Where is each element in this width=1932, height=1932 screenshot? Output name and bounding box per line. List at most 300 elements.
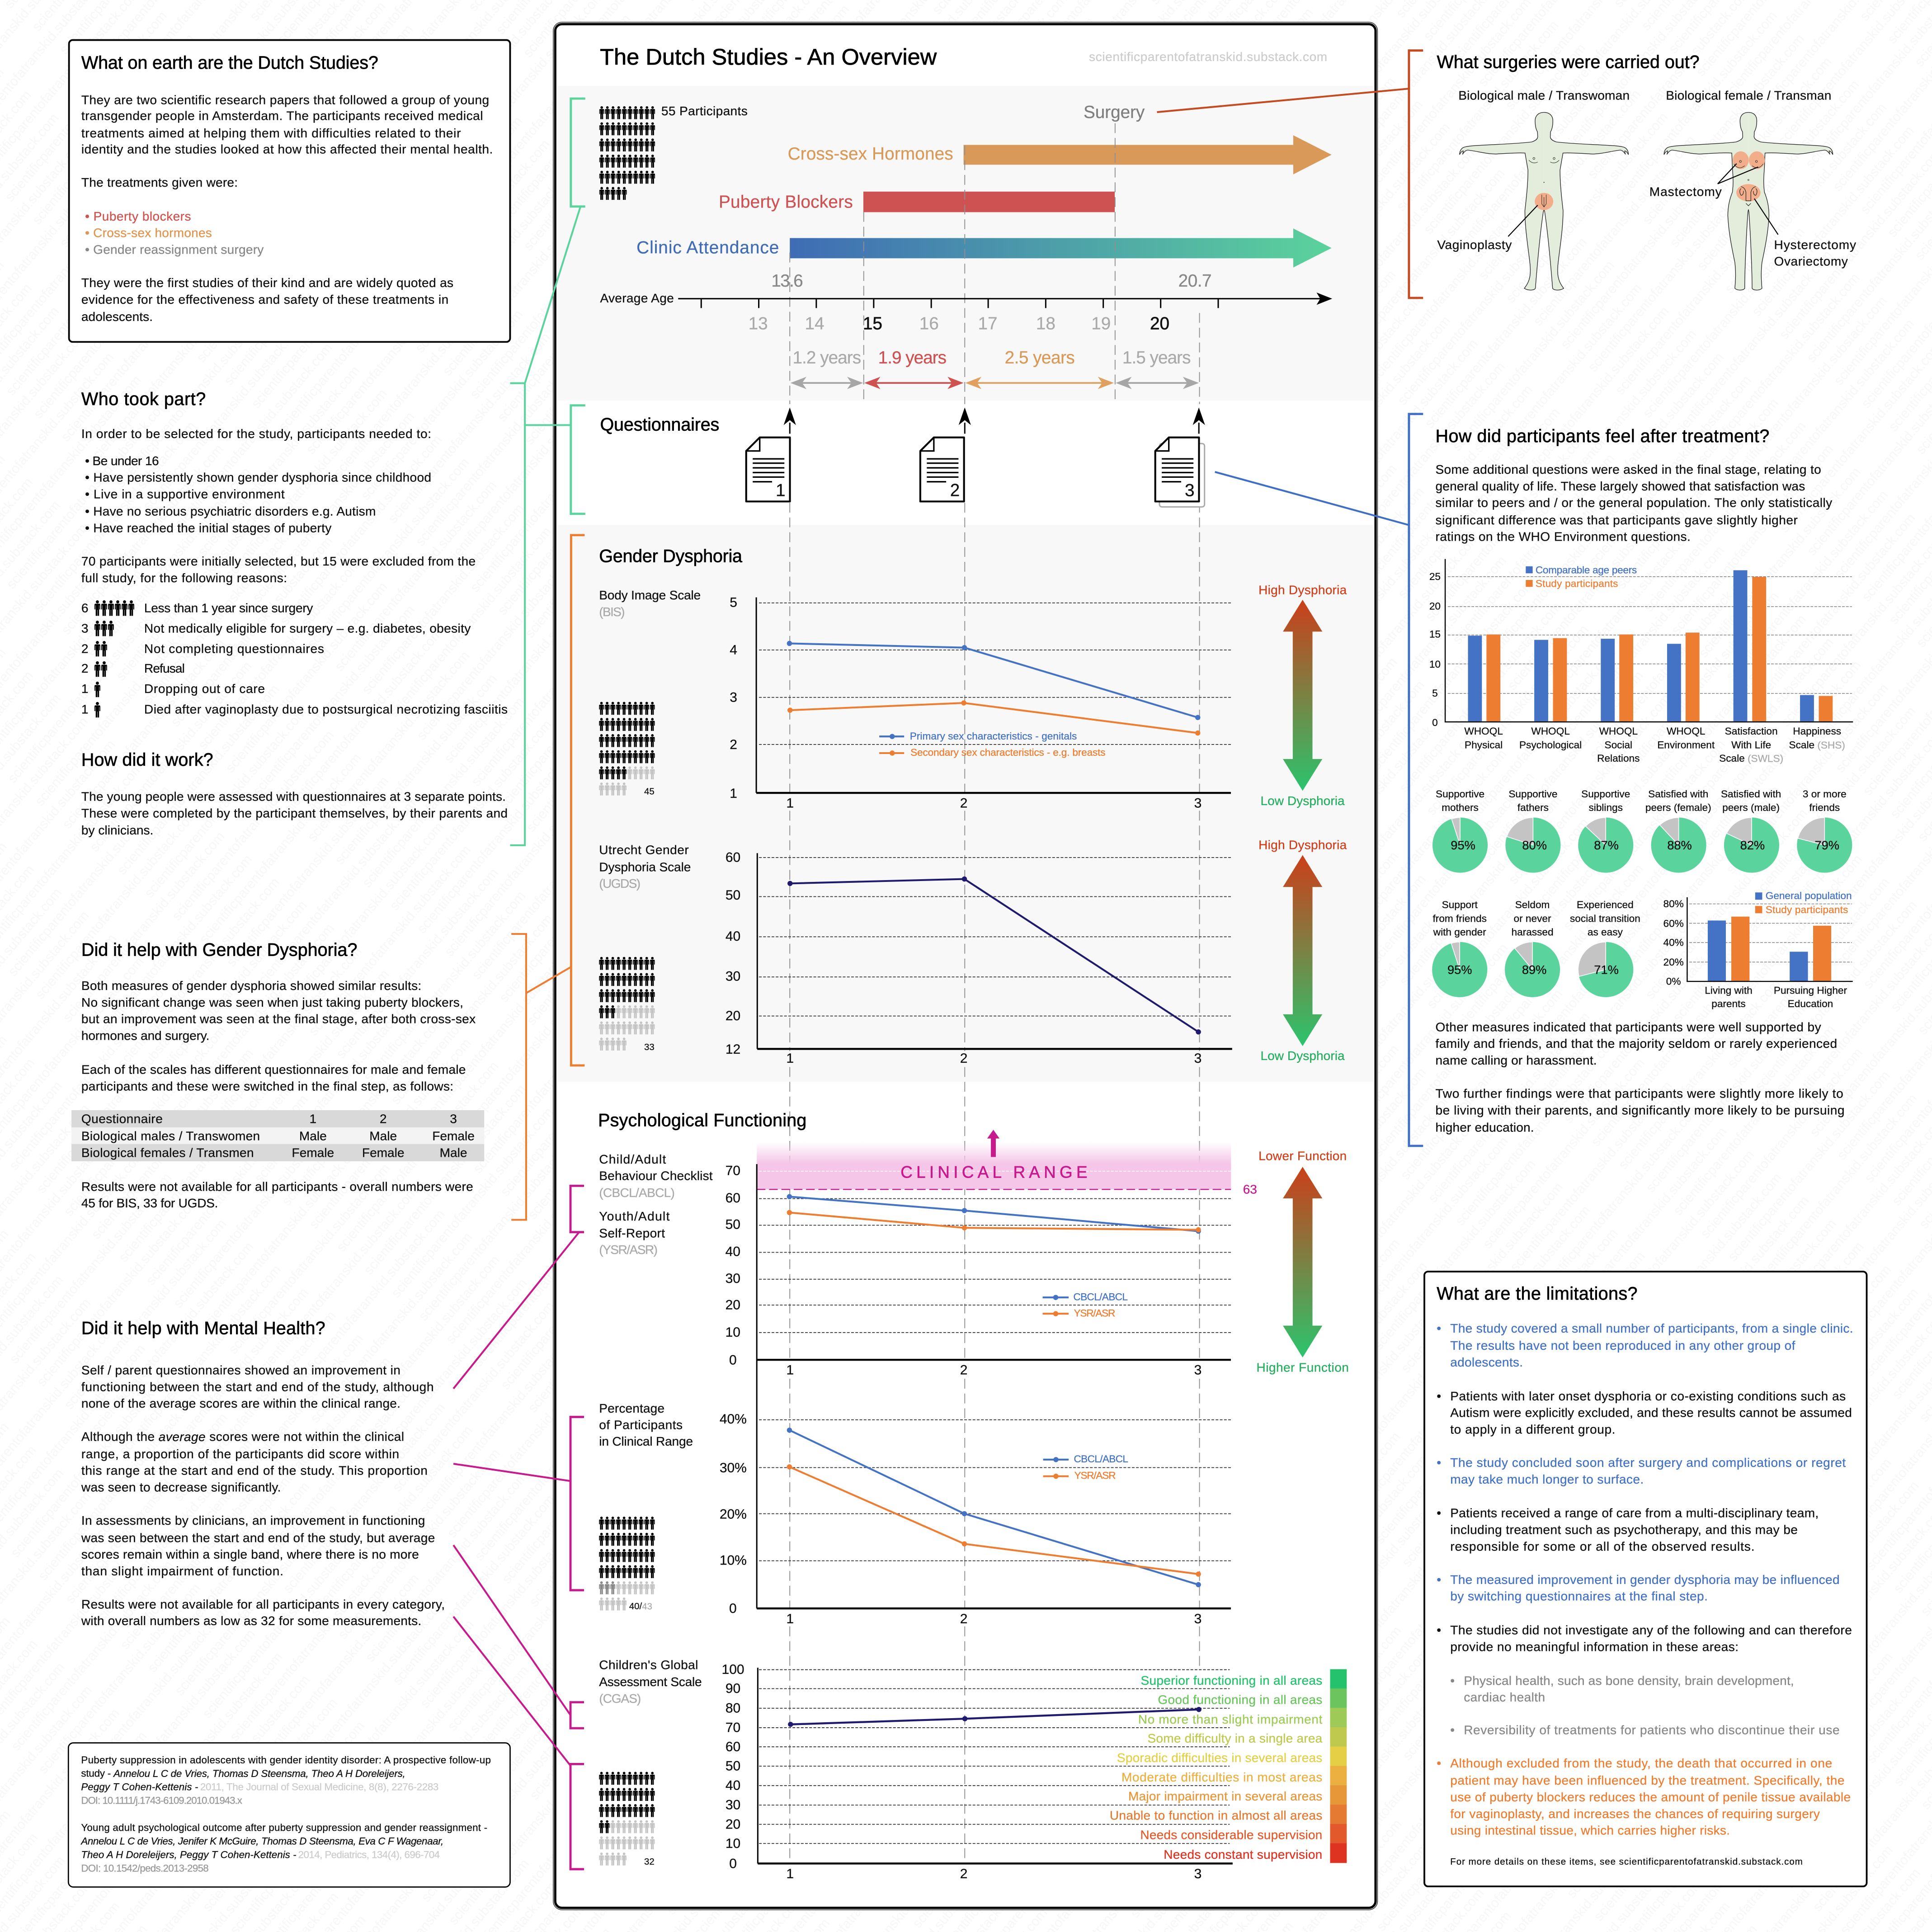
text block: results availability: Results were not available for all participants - overall numbers were [81,1179,473,1193]
limitation: regret: The study concluded soon after surgery and complications or regret [1450,1456,1846,1470]
text block: intro: adolescents. [81,310,153,324]
label: utrecht gender dysphoria scale [599,843,691,891]
pie: satisfied with peers female: 88% [1667,838,1692,852]
pie: seldom or never harassed: or never [1514,913,1551,924]
bracket: CGAS participants [570,1764,584,1869]
list: exclusion reasons: Not completing questionnaires [144,642,324,656]
text block: other measures: name calling or harassment. [1436,1053,1597,1067]
label: 55 participants: 55 Participants [661,104,748,118]
limitation: death excluded: for vaginoplasty, and increases the chances of requiring surgery [1450,1807,1820,1821]
limitation: multi-disciplinary care: • [1437,1506,1441,1520]
table: questionnaires by biological sex: Female [362,1145,405,1159]
pie: three or more friends: 3 or more [1803,788,1847,800]
pie: supportive siblings: Supportive [1581,788,1630,800]
limitation: excluded patients: • [1437,1389,1441,1403]
panel: citations [68,1743,510,1887]
panel: citations: Young adult psychological outcome after puberty suppression and gender reassignment - [81,1822,487,1833]
durations: 1.5 years [1122,348,1191,368]
category labels [1464,726,1845,764]
text block: did it help with gender dysphoria: participants and these were switched in the final step, as follows: [81,1079,453,1093]
chart: body image scale: 1 [730,786,737,801]
heading: feel: How did participants feel after treatment? [1436,426,1769,446]
heading: questionnaires: Questionnaires [600,415,719,435]
pie: support from friends with gender: from friends [1433,913,1487,924]
limitation: no information: • [1437,1623,1441,1637]
label: body image scale: (BIS) [599,605,625,619]
durations: 1.2 years [792,348,861,368]
text block: how did it work: How did it work? [81,750,213,770]
text block: intro: treatments aimed at helping them with difficulties related to their [81,126,461,140]
limitation: excluded patients: Patients with later onset dysphoria or co-existing conditions such as [1450,1389,1846,1403]
text block: how did it work: The young people were assessed with questionnaires at 3 separate points. [81,790,506,804]
chart: CBCL and YSR scores: 0 [729,1352,737,1367]
panel: citations: 2014, Pediatrics, 134(4), 696-704 [298,1849,440,1860]
label: CGAS: (CGAS) [599,1692,641,1706]
table: questionnaires by biological sex: 3 [450,1112,457,1126]
label: CBCL and YSR: (YSR/ASR) [599,1243,658,1257]
text block: did it help with mental health: functioning between the start and end of the study, although [81,1380,434,1394]
label: cross-sex hormones: Cross-sex Hormones [788,144,953,164]
list: exclusion reasons: 2 [81,642,89,656]
figure: biological female: Mastectomy [1649,184,1722,198]
durations [792,348,1191,368]
axis: age: 16 [919,314,939,333]
limitation: death excluded: patient may have been influenced by the treatment. Specifically, the [1450,1773,1844,1787]
limitation: death excluded: use of puberty blockers reduces the amount of penile tissue available [1450,1790,1851,1804]
text block: intro: The treatments given were: [81,175,238,189]
figure: biological male: Biological male / Transwoman [1458,88,1630,102]
chart: CBCL and YSR scores: 60 [726,1191,740,1206]
text block: other measures: Two further findings were that participants were slightly more likely to [1436,1087,1843,1101]
limitation: regret: may take much longer to surface. [1450,1472,1644,1486]
text block: how did it work: These were completed by the participant themselves, by their parents and [81,806,508,820]
pie: support from friends with gender: Support [1442,899,1478,910]
chart: living with parents and higher education: 60% [1663,918,1684,929]
CGAS band labels: Superior functioning in all areas [1141,1673,1322,1687]
text block: did it help with mental health: was seen between the start and end of the study, but average [81,1531,435,1545]
icon: six people [94,600,134,616]
chart: CBCL and YSR scores: 20 [726,1298,740,1313]
text block: intro: They are two scientific research papers that followed a group of young [81,93,489,107]
chart: CBCL and YSR scores: 40 [726,1244,740,1259]
bracket: CGAS [570,1702,584,1728]
limitation: excluded patients: Autism were explicitly excluded, and these results cannot be assumed [1450,1406,1852,1420]
scale arrow: UGDS dysphoria: High Dysphoria [1258,838,1347,852]
chart: utrecht gender dysphoria scale: 2 [960,1051,967,1066]
list: exclusion reasons: Died after vaginoplasty due to postsurgical necrotizing fasciitis [144,702,508,716]
category labels: WHOQL [1667,726,1705,737]
chart: living with parents and higher education: Pursuing Higher [1774,985,1847,996]
category labels: With Life [1731,739,1771,750]
icon: document 2: 2 [950,481,960,500]
limitation: multi-disciplinary care: Patients received a range of care from a multi-disciplinary team, [1450,1506,1819,1520]
pie: social transition as easy: Experienced [1577,899,1634,910]
label: CGAS: Assessment Scale [599,1675,702,1689]
list: exclusion reasons: 6 [81,601,89,615]
arrow: questionnaire 2 [959,407,971,434]
series: YSR/ASR [787,1210,1201,1232]
CGAS band labels: Major impairment in several areas [1128,1789,1322,1803]
text block: who took part: • Have reached the initial stages of puberty [85,521,331,535]
chart: utrecht gender dysphoria scale: 40 [726,929,740,944]
scale arrow: BIS dysphoria: High Dysphoria [1258,583,1347,597]
category labels: Scale (SHS) [1789,739,1845,750]
chart: quality of life bars: 5 [1432,688,1438,699]
limitation: switching questionnaires: by switching questionnaires at the final step. [1450,1589,1708,1603]
limitation: regret: • [1437,1456,1441,1470]
label: percentage of participants in clinical range: of Participants [599,1418,683,1432]
CGAS colour scale [1330,1669,1347,1863]
category labels: WHOQL [1464,726,1503,737]
text block: did it help with mental health: none of the average scores are within the clinical range. [81,1396,401,1410]
pie: supportive siblings: siblings [1589,802,1623,813]
chart: CGAS: 40 [726,1778,740,1793]
pie: seldom or never harassed: Seldom [1515,899,1550,910]
chart: CGAS: 20 [726,1817,740,1832]
list: exclusion reasons [81,600,508,717]
chart: utrecht gender dysphoria scale: 30 [726,969,740,984]
list: exclusion reasons: Less than 1 year since surgery [144,601,313,615]
legend [1043,1291,1128,1319]
chart: CGAS: 2 [960,1866,967,1881]
pie: support from friends with gender [1432,899,1487,997]
connector: questionnaire 3 to how did participants feel [1215,472,1409,525]
CGAS band labels: Unable to function in almost all areas [1110,1809,1322,1823]
category labels: Satisfaction [1725,726,1778,737]
pie: satisfied with peers female: Satisfied with [1648,788,1708,800]
legend [1043,1453,1128,1481]
limitation: no information: • [1450,1723,1455,1737]
figure: biological female [1649,88,1856,290]
panel: what are the limitations [1424,1272,1867,1886]
chart: CGAS: 60 [726,1739,740,1754]
pie: supportive mothers: 95% [1451,838,1475,852]
label: CBCL and YSR: Child/Adult [599,1152,666,1166]
chart: body image scale [730,595,1231,810]
scale arrow: function: Higher Function [1256,1361,1349,1375]
pie: social transition as easy: 71% [1594,962,1619,976]
text block: did it help with mental health: range, a proportion of the participants did score within [81,1447,399,1461]
panel: citations: Theo A H Doreleijers, Peggy T Cohen-Kettenis - [81,1849,297,1860]
label: average age: Average Age [600,291,674,305]
bracket: percentage in clinical range [570,1417,584,1590]
text block: additional questions [1436,462,1832,544]
pie: three or more friends [1797,788,1852,873]
legend [879,730,1106,758]
chart: utrecht gender dysphoria scale [726,850,1232,1066]
chart: percentage in clinical range [720,1412,1231,1626]
text block: who took part: In order to be selected for the study, participants needed to: [81,427,431,441]
chart: CGAS: 3 [1194,1866,1202,1881]
arrow: 1.9 years [864,377,964,389]
pie: supportive fathers: Supportive [1508,788,1557,800]
text block: results availability [81,1179,473,1210]
limitation: switching questionnaires: The measured improvement in gender dysphoria may be influenced [1450,1573,1840,1587]
scale arrow: BIS dysphoria: Low Dysphoria [1260,794,1345,808]
pie: supportive mothers: Supportive [1436,788,1484,800]
text block: did it help with gender dysphoria: but an improvement was seen at the final stage, after both cross-sex [81,1012,476,1026]
pie: supportive siblings [1578,788,1633,873]
chart: living with parents and higher education: 80% [1663,898,1684,909]
category labels: WHOQL [1599,726,1638,737]
chart: utrecht gender dysphoria scale: 50 [726,888,740,903]
scale arrow: BIS dysphoria [1258,583,1347,808]
chart: living with parents and higher education: parents [1711,998,1746,1009]
category labels: WHOQL [1531,726,1570,737]
arrow: 1.2 years [791,377,863,389]
pie: supportive mothers [1433,788,1488,873]
text block: additional questions: general quality of life. These largely showed that satisfaction was [1436,479,1805,493]
label: utrecht gender dysphoria scale: Dysphoria Scale [599,860,691,874]
icon: BIS participants [599,702,655,797]
arrow: 1.5 years [1116,377,1199,389]
pie: three or more friends: 79% [1814,838,1839,852]
figure: biological male: Vaginoplasty [1437,238,1512,252]
list: exclusion reasons: 2 [81,661,89,675]
label: clinic attendance: Clinic Attendance [636,238,779,257]
series: primary sex characteristics [787,641,1200,720]
pie: support from friends with gender: 95% [1447,962,1472,976]
limitation: no information: Reversibility of treatments for patients who discontinue their use [1464,1723,1840,1737]
scale arrow: function [1256,1149,1349,1375]
chart: living with parents and higher education [1663,890,1853,1009]
legend: Study participants [1536,578,1618,589]
chart: quality of life bars [1429,559,1853,764]
bracket: feel [1409,414,1423,1146]
table: questionnaires by biological sex: 2 [380,1112,387,1126]
text block: who took part [81,389,476,585]
scale arrow: UGDS dysphoria: Low Dysphoria [1260,1049,1345,1063]
text block: did it help with mental health: with overall numbers as low as 32 for some measurements. [81,1614,421,1628]
legend: YSR/ASR [1074,1470,1116,1481]
pie: three or more friends: friends [1809,802,1840,813]
text block: who took part: 70 participants were initially selected, but 15 were excluded from the [81,554,476,568]
table: questionnaires by biological sex: Biological females / Transmen [81,1145,254,1159]
text block: did it help with mental health: was seen to decrease significantly. [81,1480,281,1494]
chart: CGAS: 70 [726,1720,740,1735]
pie: social transition as easy [1570,899,1640,997]
bracket: surgeries [1409,51,1423,298]
heading: gender dysphoria: Gender Dysphoria [599,546,742,566]
text block: did it help with mental health: Although the average scores were not within the clinical [81,1430,404,1444]
icon: one person dropout [94,682,100,697]
chart: CGAS: 80 [726,1701,740,1716]
panel: citations: study - Annelou L C de Vries, Thomas D Steensma, Theo A H Doreleijers, [81,1768,405,1779]
CGAS band labels: Needs constant supervision [1164,1847,1322,1861]
icon: UGDS participants [599,957,655,1052]
label: percentage of participants in clinical range: in Clinical Range [599,1434,693,1448]
pie: seldom or never harassed [1505,899,1560,997]
text block: who took part: Who took part? [81,389,206,409]
legend: Primary sex characteristics - genitals [910,730,1077,742]
text block: did it help with mental health [81,1318,445,1628]
chart: quality of life bars: 15 [1429,628,1441,640]
pie: supportive fathers [1505,788,1560,873]
chart: CBCL and YSR scores: 1 [786,1363,794,1378]
panel: what on earth are the Dutch Studies [69,40,510,342]
text block: intro: • Gender reassignment surgery [85,242,264,256]
label: utrecht gender dysphoria scale: (UGDS) [599,876,641,891]
text block: other measures [1436,1020,1844,1135]
chart: body image scale: 4 [730,642,737,657]
list: exclusion reasons: Refusal [144,661,185,675]
limitation: no information: Physical health, such as bone density, brain development, [1464,1673,1794,1687]
icon: document 3: 3 [1185,481,1194,500]
icon: three people [94,621,114,636]
text block: intro: identity and the studies looked at how this affected their mental health. [81,142,493,156]
icon: document 2 [920,438,964,501]
chart: percentage in clinical range: 40% [720,1412,747,1427]
chart: quality of life bars: 10 [1429,659,1441,670]
text block: did it help with gender dysphoria: hormones and surgery. [81,1029,209,1043]
chart: body image scale: 2 [960,796,967,810]
chart: body image scale: 3 [730,690,737,705]
chart: body image scale: 3 [1194,796,1202,810]
clinical range band: CLINICAL RANGE [900,1163,1087,1182]
text block: intro: • Cross-sex hormones [85,226,212,240]
pie: supportive siblings: 87% [1594,838,1619,852]
website url: scientificparentofatranskid.substack.com [1089,50,1327,64]
list: exclusion reasons: Not medically eligible for surgery – e.g. diabetes, obesity [144,622,471,636]
text block: how did it work [81,750,508,837]
label: CGAS: Children's Global [599,1658,698,1672]
scale arrow: UGDS dysphoria [1258,838,1347,1063]
arrow: clinical range up [987,1130,999,1157]
pie: social transition as easy: social transition [1570,913,1640,924]
category labels: Psychological [1519,739,1582,750]
table: questionnaires by biological sex: Questionnaire [81,1112,163,1126]
chart: CGAS: 1 [786,1866,794,1881]
panel: how did participants feel after treatment [1409,414,1853,1146]
text block: intro: evidence for the effectiveness and safety of these treatments in [81,292,448,306]
limitation: small study [1437,1321,1853,1369]
category labels: Scale (SWLS) [1719,753,1783,764]
text block: who took part: • Be under 16 [85,454,159,468]
pie: seldom or never harassed: 89% [1522,962,1546,976]
table: questionnaires by biological sex: Male [299,1129,327,1143]
text block: additional questions: significant difference was that participants gave slightly higher [1436,513,1798,527]
chart: CBCL and YSR scores: 10 [726,1325,740,1340]
scale arrow: function: Lower Function [1258,1149,1347,1163]
category labels: Physical [1465,739,1503,750]
limitation: multi-disciplinary care: responsible for some or all of the observed results. [1450,1539,1754,1553]
chart: percentage in clinical range: 3 [1194,1612,1202,1626]
limitation: multi-disciplinary care [1437,1506,1819,1553]
chart: CGAS [722,1662,1233,1881]
chart: percentage in clinical range: 2 [960,1612,967,1626]
chart: utrecht gender dysphoria scale: 3 [1194,1051,1202,1066]
label: CBCL and YSR: Behaviour Checklist [599,1169,713,1183]
heading: limitations: What are the limitations? [1437,1284,1638,1304]
chart: body image scale: 1 [786,796,794,810]
chart: quality of life bars: 20 [1429,601,1441,612]
text block: did it help with gender dysphoria: Both measures of gender dysphoria showed similar results: [81,979,421,993]
panel: citations: DOI: 10.1111/j.1743-6109.2010.01943.x [81,1795,242,1806]
heading: surgeries: What surgeries were carried out? [1437,52,1700,72]
arrow: 2.5 years [966,377,1114,389]
legend: Study participants [1766,904,1848,915]
chart: CGAS: 0 [729,1856,737,1871]
connector: surgery to surgeries panel [1157,89,1409,112]
bracket: timeline [571,99,585,207]
figure: biological female: Hysterectomy [1774,238,1856,252]
pie: satisfied with peers male [1721,788,1781,873]
legend [1526,564,1637,589]
arrow: clinic attendance [790,228,1332,268]
icon: document 3 [1155,438,1205,507]
icon: CGAS participants: 32 [644,1857,655,1867]
chart: utrecht gender dysphoria scale: 20 [726,1008,740,1023]
pie: supportive fathers: 80% [1522,838,1547,852]
value: age 13.6: 13.6 [771,271,803,291]
axis: age [678,292,1332,333]
series: CBCL/ABCL [787,1194,1201,1234]
text block: did it help with gender dysphoria: Did it help with Gender Dysphoria? [81,940,357,960]
text block: did it help with mental health: Results were not available for all participants in every category, [81,1597,445,1611]
bracket: gender dysphoria [571,535,584,1065]
bracket: questionnaires [571,405,585,514]
pie: supportive fathers: fathers [1517,802,1549,813]
limitation: small study: The study covered a small number of participants, from a single clinic. [1450,1321,1853,1335]
label: body image scale [599,588,701,619]
chart: utrecht gender dysphoria scale: 12 [726,1042,740,1057]
chart: percentage in clinical range: 0 [729,1601,737,1616]
pie: satisfied with peers male: 82% [1740,838,1765,852]
title: The Dutch Studies - An Overview [600,44,937,70]
label: percentage of participants in clinical range: Percentage [599,1401,664,1415]
text block: intro: transgender people in Amsterdam. The participants received medical [81,109,483,123]
chart: living with parents and higher education: 0% [1666,976,1681,987]
table: questionnaires by biological sex: 1 [310,1112,316,1126]
chart: CBCL and YSR scores: 30 [726,1271,740,1286]
panel: citations: 2011, The Journal of Sexual Medicine, 8(8), 2276-2283 [200,1781,438,1793]
text block: did it help with mental health: scores remain within a single band, where there is no more [81,1547,419,1561]
pie: satisfied with peers female [1645,788,1711,873]
table: questionnaires by biological sex: Male [440,1145,467,1159]
text block: intro [81,93,493,324]
table: questionnaires by biological sex: Female [432,1129,475,1143]
icon: UGDS participants: 33 [644,1042,655,1052]
figure: biological male [1437,88,1630,290]
legend [1755,890,1852,915]
chart: quality of life bars: 25 [1429,571,1441,582]
axis: age: 14 [805,314,825,333]
chart: CBCL and YSR scores: 2 [960,1363,967,1378]
figure: biological female: Biological female / Transman [1666,88,1831,102]
limitation: regret [1437,1456,1846,1486]
limitation: small study: • [1437,1321,1441,1335]
list: exclusion reasons: 1 [81,682,89,696]
label: CBCL and YSR [599,1152,713,1257]
chart: body image scale: 2 [730,737,737,752]
label: surgery: Surgery [1084,103,1145,122]
label: body image scale: Body Image Scale [599,588,701,602]
text block: intro: They were the first studies of their kind and are widely quoted as [81,276,453,290]
chart: percentage in clinical range: 10% [720,1553,747,1568]
text block: other measures: be living with their parents, and significantly more likely to be pursuing [1436,1103,1844,1117]
limitation: switching questionnaires: • [1437,1573,1441,1587]
limitation: no information: • [1450,1673,1455,1687]
pie: satisfied with peers female: peers (female) [1645,802,1711,813]
clinical range band: 63 [1243,1183,1257,1197]
text block: other measures: Other measures indicated that participants were well supported by [1436,1020,1821,1034]
CGAS band labels [1110,1673,1323,1861]
category labels: Relations [1597,753,1640,764]
legend: General population [1766,890,1852,901]
durations: 1.9 years [878,348,947,368]
text block: did it help with mental health: than slight impairment of function. [81,1564,283,1578]
category labels: Social [1604,739,1632,750]
